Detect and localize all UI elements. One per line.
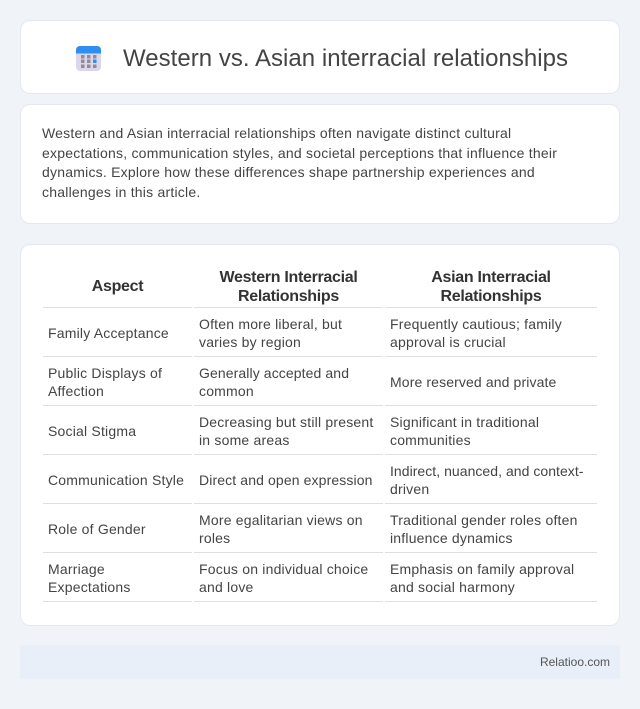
- row: marriage expectations: Expectations: [48, 579, 131, 595]
- header card: [20, 20, 620, 94]
- row: marriage expectations: [48, 561, 131, 595]
- comparison table: common: [199, 383, 254, 399]
- comparison table: Decreasing but still present: [199, 414, 373, 430]
- comparison table: More reserved and private: [390, 374, 556, 390]
- footer credit: Relatioo.com: [540, 655, 610, 669]
- comparison table: Generally accepted and: [199, 365, 349, 381]
- comparison table: Direct and open expression: [199, 472, 373, 488]
- comparison table: Traditional gender roles often: [390, 512, 578, 528]
- comparison table: Significant in traditional: [390, 414, 539, 430]
- comparison table: Frequently cautious; family: [390, 316, 562, 332]
- column heading: asian: Asian Interracial: [431, 269, 551, 286]
- comparison table: communities: [390, 432, 471, 448]
- intro text: Western and Asian interracial relationships often navigate distinct cultural: [42, 125, 511, 141]
- comparison table: in some areas: [199, 432, 290, 448]
- column heading: western: Relationships: [238, 288, 339, 305]
- row: public displays of affection: Affection: [48, 383, 104, 399]
- title: Western vs. Asian interracial relationships: [123, 45, 568, 72]
- comparison table: approval is crucial: [390, 334, 506, 350]
- intro card: [20, 104, 620, 224]
- comparison table: Often more liberal, but: [199, 316, 342, 332]
- row: public displays of affection: Public Displays of: [48, 365, 162, 381]
- intro text: expectations, communication styles, and societal perceptions that influence their: [42, 145, 557, 161]
- comparison table: and social harmony: [390, 579, 515, 595]
- row: marriage expectations: Marriage: [48, 561, 105, 577]
- row: public displays of affection: [48, 365, 162, 399]
- intro text: challenges in this article.: [42, 184, 200, 200]
- comparison table: Indirect, nuanced, and context-: [390, 463, 583, 479]
- comparison table: More egalitarian views on: [199, 512, 363, 528]
- column heading: western: [219, 269, 358, 305]
- comparison table: roles: [199, 530, 230, 546]
- row: family acceptance: Family Acceptance: [48, 325, 169, 341]
- row: communication style: Communication Style: [48, 472, 184, 488]
- column heading: asian: Relationships: [440, 288, 542, 305]
- intro text: dynamics. Explore how these differences shape partnership experiences and: [42, 164, 535, 180]
- comparison table: varies by region: [199, 334, 301, 350]
- comparison table: Focus on individual choice: [199, 561, 368, 577]
- comparison table: and love: [199, 579, 254, 595]
- comparison table: driven: [390, 481, 429, 497]
- table card: [20, 244, 620, 626]
- column heading: asian: [431, 269, 551, 305]
- column heading: aspect: Aspect: [92, 278, 143, 295]
- footer bar: [20, 645, 620, 679]
- row: social stigma: Social Stigma: [48, 423, 136, 439]
- icon: calendar: [76, 46, 101, 71]
- row: role of gender: Role of Gender: [48, 521, 146, 537]
- comparison table: influence dynamics: [390, 530, 513, 546]
- comparison table: Emphasis on family approval: [390, 561, 574, 577]
- column heading: western: Western Interracial: [219, 269, 358, 286]
- intro text: [42, 125, 557, 200]
